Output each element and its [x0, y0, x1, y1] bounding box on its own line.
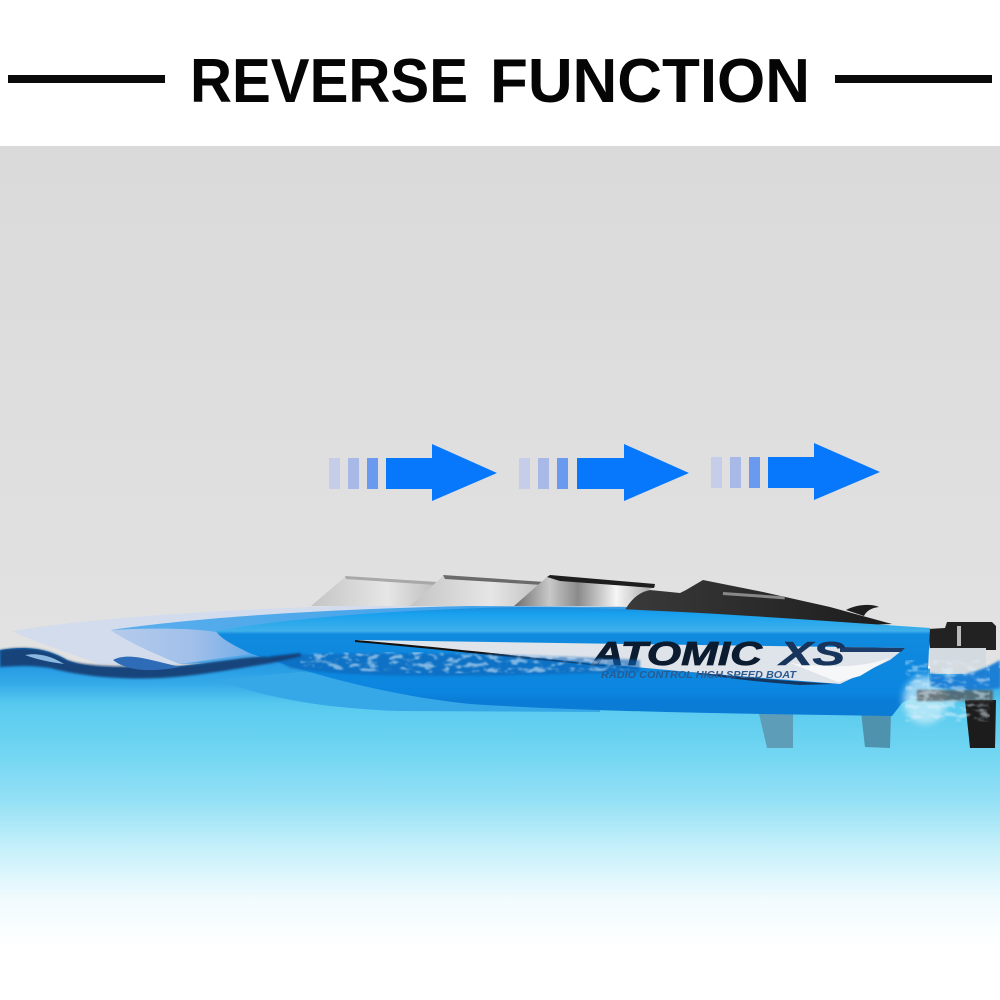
water line splash: [0, 648, 640, 679]
logo: XS: [777, 635, 845, 672]
arrow 1: [329, 444, 497, 501]
cockpit chrome: [514, 577, 656, 606]
arrow 2: [519, 444, 689, 501]
main boat: [216, 575, 996, 748]
stern debris: [917, 690, 993, 701]
grey backdrop: [0, 146, 1000, 666]
direction arrows: [329, 443, 880, 501]
ghost boat mid: [111, 575, 640, 670]
splash foam: [300, 652, 630, 673]
hull: [216, 607, 930, 716]
stern spray: [903, 660, 1000, 724]
graphic stripe: [355, 640, 905, 685]
bow foam: [113, 657, 180, 670]
stern wake: [930, 660, 1000, 690]
arrow 3: [711, 443, 880, 500]
stern foam block: [930, 648, 986, 674]
transom drive: [928, 622, 996, 650]
submerged mid hull: [217, 672, 600, 712]
ghost boat far: [12, 576, 500, 664]
title: REVERSE: [190, 47, 468, 116]
title: [8, 47, 992, 116]
hull waterline tint: [270, 653, 640, 676]
title: FUNCTION: [490, 47, 810, 116]
logo: [591, 635, 845, 672]
dorsal fin: [846, 605, 879, 616]
logo tagline: RADIO CONTROL HIGH SPEED BOAT: [601, 670, 797, 681]
dark canopy: [625, 580, 892, 625]
dark wave band: [0, 648, 302, 679]
boat rudders and fins: [757, 700, 996, 748]
water surface: [0, 648, 1000, 1000]
logo: ATOMIC: [591, 635, 764, 672]
